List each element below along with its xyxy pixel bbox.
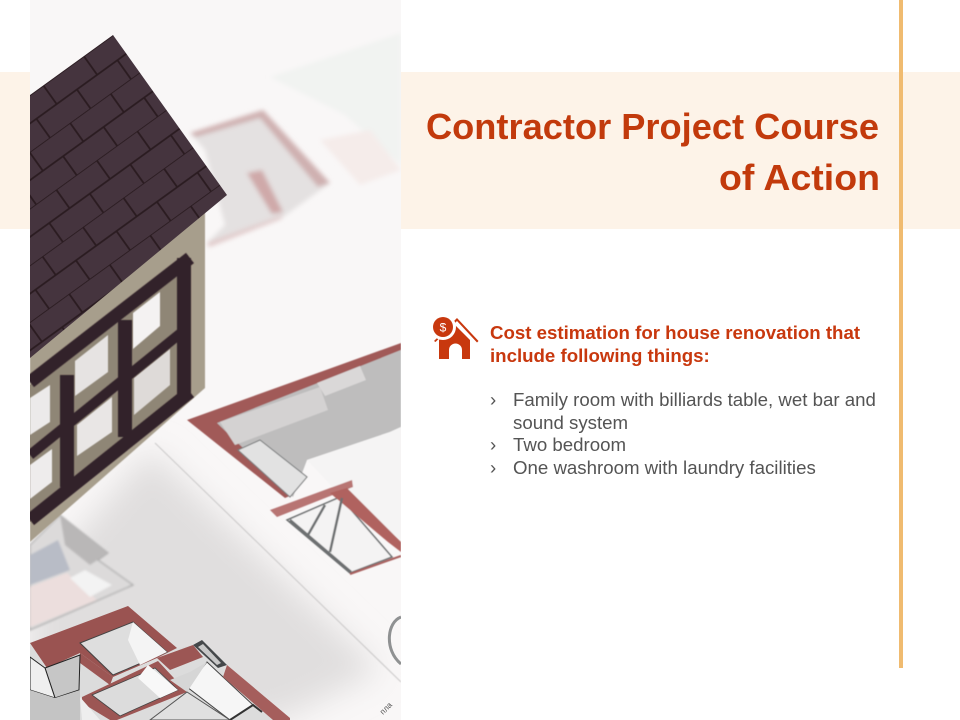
icon: house with dollar coin: $ (440, 320, 447, 334)
subheading (490, 322, 860, 366)
bullet list: › (490, 389, 496, 410)
floor plan, right middle (187, 343, 401, 574)
floor plan, lower left (30, 515, 133, 630)
bullet: washroom (490, 457, 816, 478)
bullet list (490, 389, 876, 478)
subheading: Cost estimation for house renovation that (490, 322, 860, 343)
ring on plan (389, 617, 401, 664)
bullet list: sound system (513, 412, 628, 433)
bullet list: Two bedroom (513, 434, 626, 455)
house walls (30, 205, 205, 542)
title (426, 106, 880, 198)
photo: model house on floor plans (30, 28, 401, 720)
bullet list: › (490, 434, 496, 455)
title: of Action (719, 157, 880, 198)
small print on plan: пла (378, 700, 394, 716)
roof (30, 35, 227, 358)
subheading: include following things: (490, 345, 710, 366)
vertical accent line (899, 0, 903, 668)
floor plan, bottom (30, 606, 290, 720)
inner window reveal (30, 255, 188, 522)
bullet list: Family room with billiards table, wet bar and (513, 389, 876, 410)
soft grey shade on lower paper (30, 450, 380, 720)
bullet list: One washroom with laundry facilities (513, 457, 816, 478)
icon: house with dollar coin (433, 317, 478, 359)
title band (0, 72, 960, 229)
bullet: family room (490, 389, 876, 433)
blurred floor plan, top (190, 33, 401, 247)
window frame (30, 258, 190, 520)
crease line on paper (155, 443, 401, 682)
bullet list: › (490, 457, 496, 478)
window panes (30, 292, 170, 499)
title: Contractor Project Course (426, 106, 879, 147)
bullet: two bedroom (490, 434, 626, 455)
